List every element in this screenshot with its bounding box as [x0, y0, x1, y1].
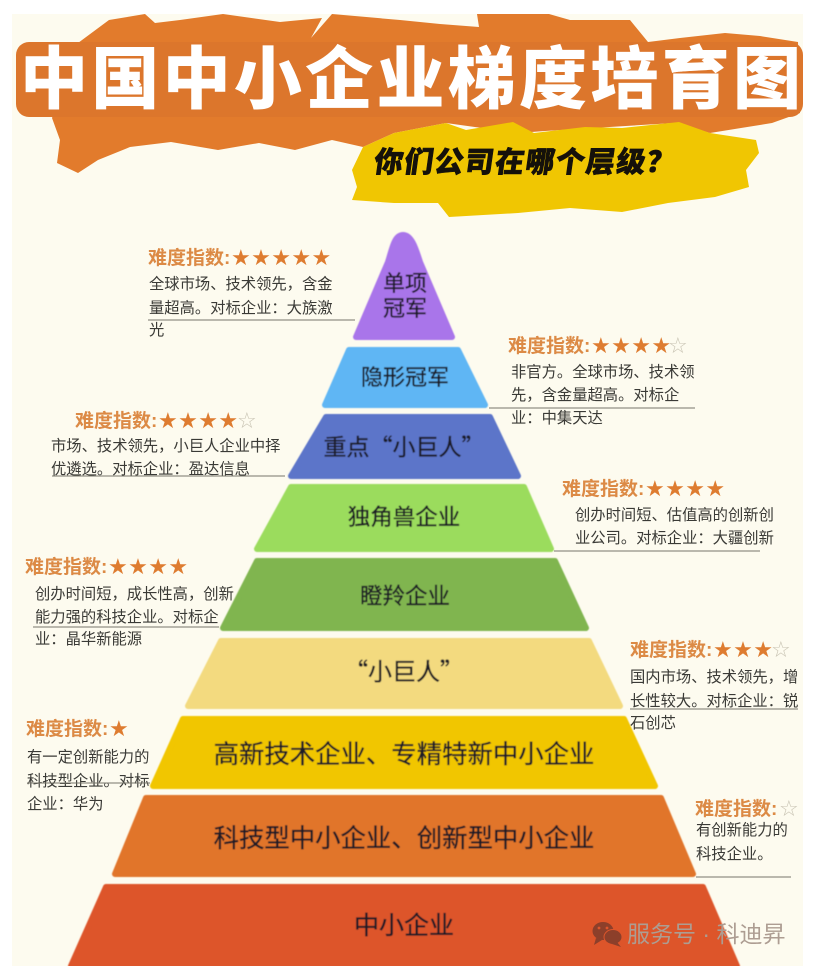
callout: 科技型中小企业 [695, 797, 799, 877]
callout: 高新技术企业: 难度指数: [26, 717, 108, 740]
callout: 单项冠军 [148, 246, 355, 339]
callout: 独角兽企业 [554, 477, 774, 551]
callout: 小巨人 [630, 638, 798, 732]
tier 7: 高新技术企业 [153, 719, 655, 786]
subtitle: 你们公司在哪个层级？ [372, 139, 680, 181]
tier 4: 独角兽企业: 独角兽企业 [348, 500, 460, 532]
callout: 小巨人: ★★★ [713, 638, 773, 663]
brush stroke: yellow subtitle background [352, 122, 759, 217]
tier 1: 单项冠军 [356, 235, 452, 337]
tier 5: 瞪羚企业: 瞪羚企业 [360, 579, 450, 611]
callout: 重点小巨人: 难度指数: [75, 409, 157, 432]
title: 中国中小企业梯度培育图 [20, 24, 804, 123]
callout: 单项冠军: 难度指数: [148, 246, 230, 269]
tier 2: 隐形冠军: 隐形冠军 [361, 360, 449, 392]
tier 3: 重点小巨人: 重点“小巨人” [324, 428, 484, 462]
callout: 科技型中小企业: 难度指数: [695, 797, 777, 820]
callout: 独角兽企业: ★★★★ [645, 477, 726, 502]
pyramid [71, 235, 737, 966]
callout: 小巨人: 石创芯 [630, 715, 676, 732]
callout: 瞪羚企业: 创办时间短，成长性高，创新 [35, 586, 234, 603]
callout: 科技型中小企业: ☆ [779, 797, 799, 822]
callout: 重点小巨人: ☆ [237, 409, 257, 434]
tier 8: 科技型中小企业: 科技型中小企业、创新型中小企业 [214, 819, 594, 855]
callout: 科技型中小企业: 有创新能力的 [696, 822, 788, 839]
tier 7: 高新技术企业: 高新技术企业、专精特新中小企业 [214, 735, 594, 771]
callout: 隐形冠军: 先，含金量超高。对标企 [511, 386, 679, 404]
tier 3: 重点小巨人 [291, 417, 518, 476]
callout: 科技型中小企业: 科技企业。 [696, 845, 772, 863]
callout: 瞪羚企业: 难度指数: [25, 555, 107, 578]
callout: 瞪羚企业 [25, 555, 234, 648]
icon: wechat [592, 922, 622, 947]
brush stroke: title band rounded edge [16, 42, 803, 117]
callout: 隐形冠军: 非官方。全球市场、技术领 [511, 363, 695, 381]
callout: 瞪羚企业: 业：晶华新能源 [35, 631, 142, 648]
tier 6: 小巨人 [188, 641, 620, 706]
callout: 单项冠军: 光 [149, 322, 164, 339]
callout: 高新技术企业: 科技型企业。对标 [27, 772, 149, 790]
callout: 高新技术企业: 有一定创新能力的 [27, 749, 149, 766]
tier 9: 中小企业: 中小企业 [354, 906, 454, 942]
callout: 单项冠军: ★★★★★ [231, 246, 332, 271]
callout: 小巨人: 难度指数: [630, 638, 712, 661]
callout: 小巨人: 长性较大。对标企业：锐 [630, 692, 798, 710]
callout: 隐形冠军 [489, 334, 695, 427]
tier 4: 独角兽企业 [257, 487, 551, 549]
callout: 小巨人: ☆ [771, 638, 791, 663]
callout: 瞪羚企业: ★★★★ [108, 555, 188, 580]
callout: 重点小巨人: 优遴选。对标企业：盈达信息 [51, 460, 250, 478]
tier 5: 瞪羚企业 [223, 561, 586, 628]
callout: 高新技术企业 [26, 717, 150, 813]
callout: 重点小巨人: ★★★★ [158, 409, 238, 434]
tier 6: 小巨人: “小巨人” [344, 652, 464, 687]
callout: 独角兽企业: 业公司。对标企业：大疆创新 [575, 529, 774, 547]
callout: 重点小巨人 [51, 409, 285, 478]
tier 9: 中小企业 [71, 887, 737, 966]
callout: 瞪羚企业: 能力强的科技企业。对标企 [35, 608, 219, 626]
callout: 隐形冠军: ☆ [668, 334, 688, 359]
callout: 独角兽企业: 难度指数: [562, 477, 644, 500]
callout: 隐形冠军: 业：中集天达 [511, 410, 603, 427]
tier 8: 科技型中小企业 [115, 798, 693, 874]
callout: 单项冠军: 量超高。对标企业：大族激 [149, 299, 333, 317]
tier 1: 单项冠军: 冠军 [383, 291, 427, 323]
tier 1: 单项冠军: 单项 [383, 266, 427, 298]
callout: 单项冠军: 全球市场、技术领先，含金 [149, 275, 333, 293]
tier 2: 隐形冠军 [325, 350, 485, 405]
callout: 高新技术企业: 企业：华为 [27, 795, 104, 813]
callout: 隐形冠军: 难度指数: [508, 334, 590, 357]
callout: 隐形冠军: ★★★★ [591, 334, 672, 359]
brush stroke: orange title background [52, 14, 800, 173]
callout: 小巨人: 国内市场、技术领先，增 [630, 669, 798, 686]
callout: 重点小巨人: 市场、技术领先，小巨人企业中择 [51, 437, 280, 455]
callout: 高新技术企业: ★ [109, 717, 129, 742]
watermark: 服务号 · 科迪昇 [627, 921, 785, 947]
callout: 独角兽企业: 创办时间短、估值高的创新创 [575, 507, 774, 524]
